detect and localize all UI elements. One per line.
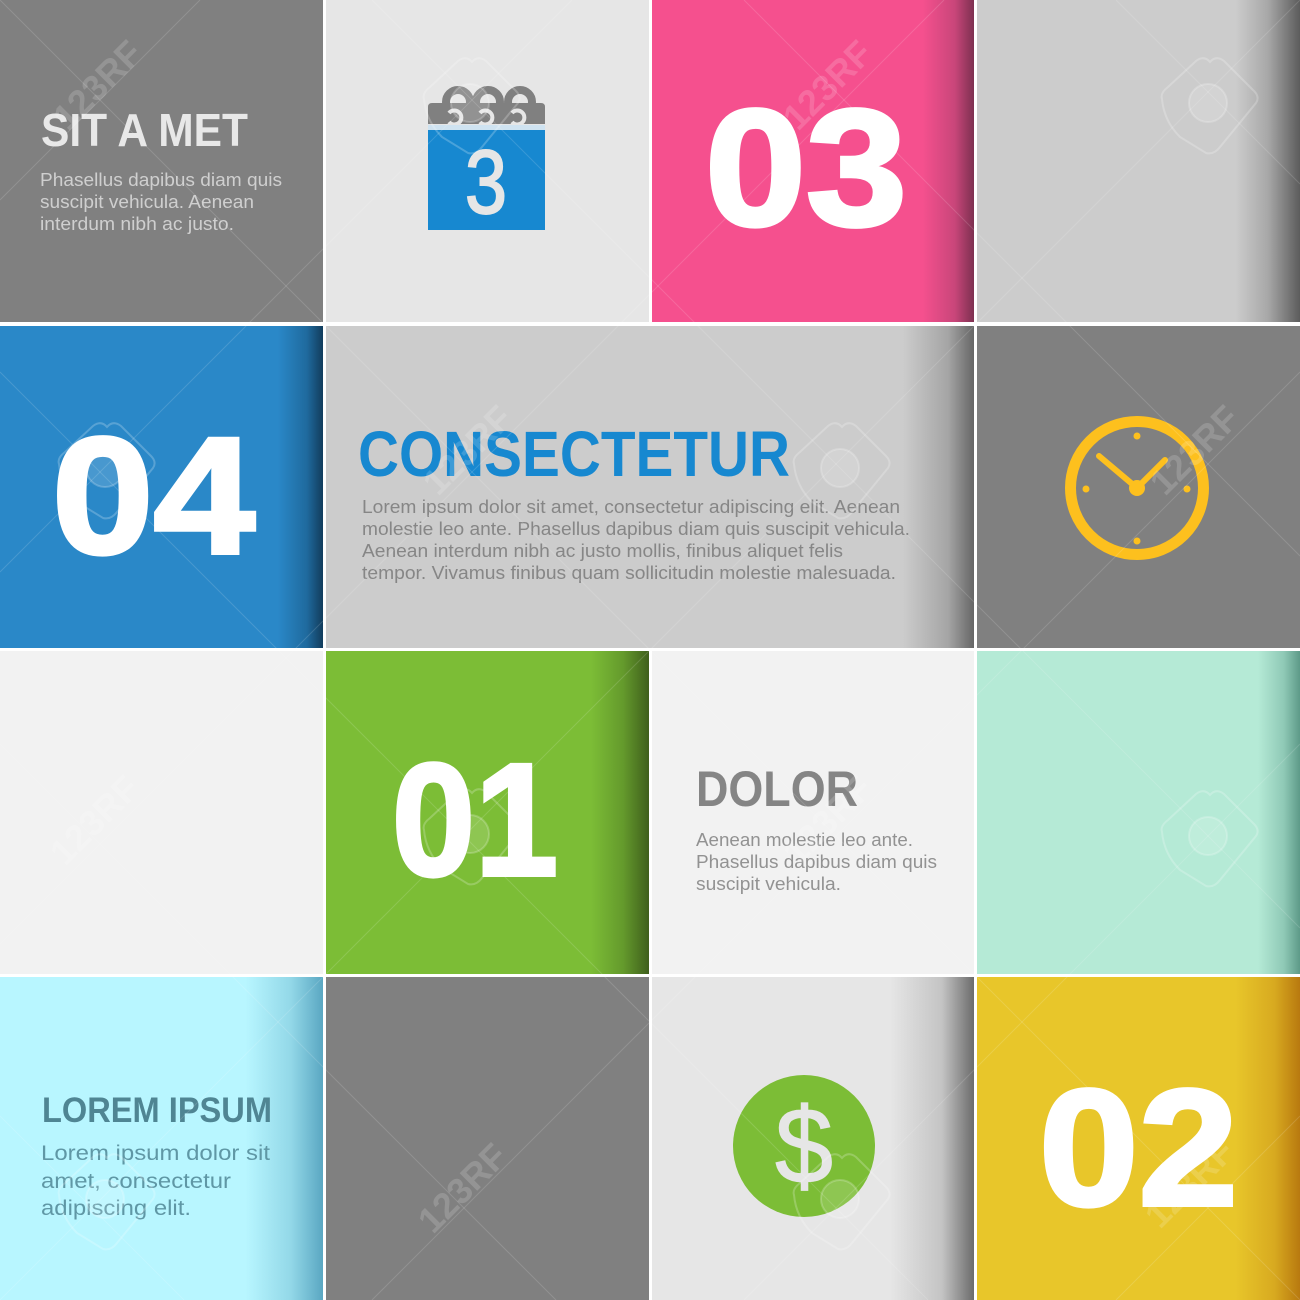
panel: sit a met	[0, 0, 323, 322]
panel: lorem ipsum	[0, 977, 323, 1300]
number 02: 02	[1039, 1056, 1238, 1241]
text block: consectetur	[362, 497, 910, 583]
watermark: stock text: 123RF	[410, 1135, 515, 1241]
text block: dolor: Aenean molestie leo ante.	[696, 830, 913, 850]
watermark: stock text: 123RF	[775, 32, 880, 138]
panel: number 02	[977, 977, 1300, 1300]
panel: calendar	[326, 0, 649, 322]
text block: consectetur: molestie leo ante. Phasellus dapibus diam quis suscipit vehicula.	[362, 519, 910, 539]
text block: lorem ipsum: adipiscing elit.	[41, 1197, 191, 1220]
watermark: stock text: 123RF	[45, 32, 150, 138]
number 01: 01	[392, 730, 558, 909]
icon: clock	[1070, 422, 1204, 554]
text block: sit a met	[40, 170, 282, 234]
panel: dolor	[652, 651, 974, 974]
icon: calendar: 3	[465, 133, 507, 233]
panel: number 04	[0, 326, 323, 648]
panel: consectetur	[326, 326, 974, 648]
heading: sit a met: SIT A MET	[41, 104, 248, 156]
text block: consectetur: Aenean interdum nibh ac justo mollis, finibus aliquet felis	[362, 541, 843, 561]
number 03: 03	[705, 76, 907, 261]
text block: dolor: suscipit vehicula.	[696, 874, 841, 894]
text block: dolor	[696, 830, 937, 894]
text block: sit a met: suscipit vehicula. Aenean	[40, 192, 254, 212]
heading: consectetur: CONSECTETUR	[358, 418, 790, 490]
panel: number 01	[326, 651, 649, 974]
watermark: stock text: 123RF	[1137, 1130, 1242, 1236]
watermark: stock text: 123RF	[415, 397, 520, 503]
watermark: stock text: 123RF	[775, 767, 880, 873]
text block: dolor: Phasellus dapibus diam quis	[696, 852, 937, 872]
heading: lorem ipsum: LOREM IPSUM	[42, 1091, 272, 1130]
watermark: stock text: 123RF	[42, 767, 147, 873]
panel: number 03	[652, 0, 974, 322]
text block: lorem ipsum: amet, consectetur	[41, 1170, 231, 1193]
heading: dolor: DOLOR	[696, 761, 858, 817]
panel: dollar	[652, 977, 974, 1300]
panel: left blank	[0, 651, 323, 974]
icon: dollar coin: $	[775, 1085, 833, 1206]
panel: grey blank	[326, 977, 649, 1300]
text block: consectetur: Lorem ipsum dolor sit amet, consectetur adipiscing elit. Aenean	[362, 497, 900, 517]
icon: calendar	[428, 90, 545, 233]
text block: sit a met: interdum nibh ac justo.	[40, 214, 234, 234]
text block: consectetur: tempor. Vivamus finibus quam sollicitudin molestie malesuada.	[362, 563, 896, 583]
panel: mint blank	[977, 651, 1300, 974]
panel: top right blank	[977, 0, 1300, 322]
panel: clock	[977, 326, 1300, 648]
watermark: stock text: 123RF	[1142, 397, 1247, 503]
number 04: 04	[52, 404, 255, 589]
text block: sit a met: Phasellus dapibus diam quis	[40, 170, 282, 190]
text block: lorem ipsum: Lorem ipsum dolor sit	[41, 1142, 270, 1165]
text block: lorem ipsum	[41, 1142, 270, 1220]
icon: dollar coin	[733, 1075, 875, 1217]
